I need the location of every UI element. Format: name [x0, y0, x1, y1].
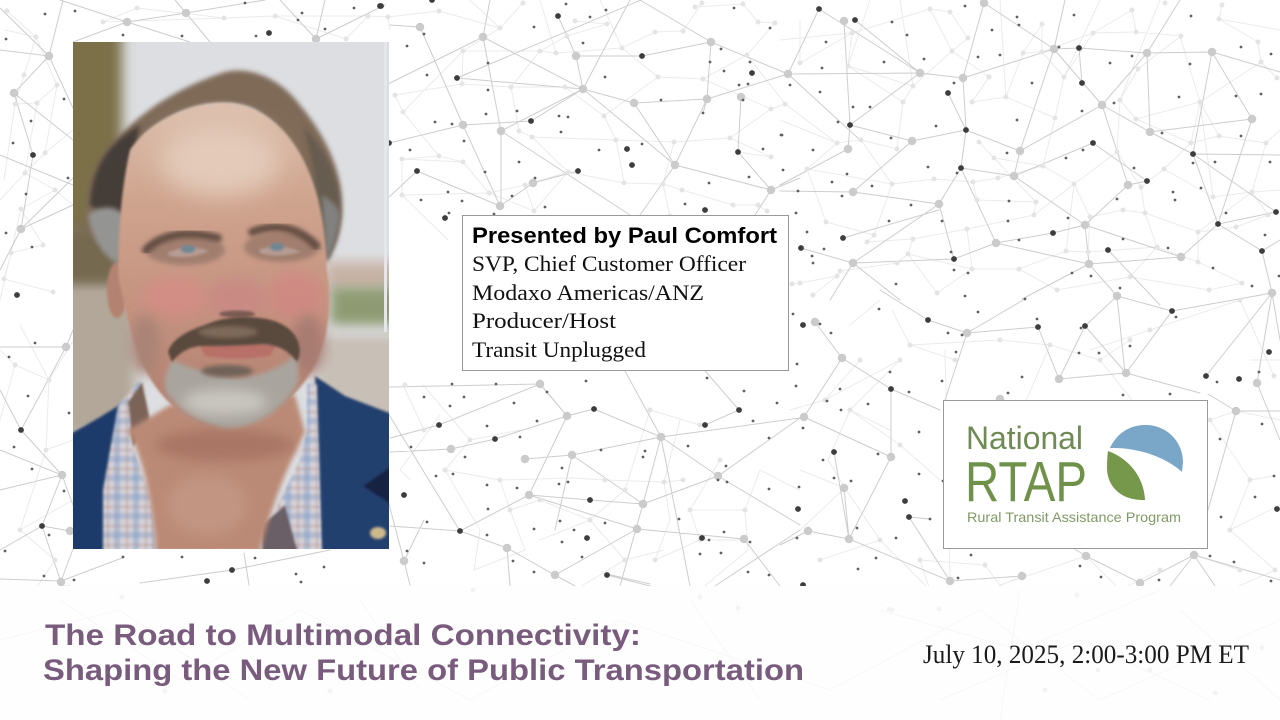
- presenter role 1: SVP, Chief Customer Officer: [472, 251, 747, 276]
- neck and chest: [128, 395, 305, 552]
- title: [43, 619, 804, 687]
- footer band: [0, 586, 1280, 720]
- title: Shaping the New Future of Public Transportation: [43, 654, 804, 687]
- speaker photo: [73, 42, 389, 549]
- ear: [107, 262, 127, 318]
- presenter text box: [462, 216, 788, 370]
- lapel pin: [370, 527, 386, 539]
- presenter organization 2: Transit Unplugged: [472, 337, 646, 362]
- icon: logo green leaf: [1107, 451, 1145, 500]
- hair: [86, 70, 342, 265]
- presenter organization 1: Modaxo Americas/ANZ: [472, 280, 704, 305]
- date and time: July 10, 2025, 2:00-3:00 PM ET: [923, 640, 1249, 669]
- presenter role 2: Producer/Host: [472, 308, 616, 333]
- beard and moustache: [165, 317, 300, 428]
- logo wordmark: National: National: [966, 420, 1083, 456]
- eyes and brows: [145, 227, 320, 265]
- title: The Road to Multimodal Connectivity:: [45, 619, 641, 652]
- jacket: [70, 376, 392, 552]
- large dark nodes: [17, 0, 1277, 585]
- logo wordmark: RTAP: RTAP: [965, 450, 1087, 514]
- logo tagline: Rural Transit Assistance Program: [967, 509, 1181, 525]
- large gray nodes: [14, 3, 1272, 583]
- face shading: [131, 124, 324, 375]
- photo backdrop: [73, 42, 389, 549]
- shirt: [103, 380, 322, 552]
- face: [118, 103, 329, 428]
- logo box: National RTAP: [944, 400, 1208, 548]
- icon: logo blue arc: [1110, 425, 1183, 472]
- nose: [214, 282, 258, 318]
- presenter name: Presented by Paul Comfort: [472, 223, 778, 248]
